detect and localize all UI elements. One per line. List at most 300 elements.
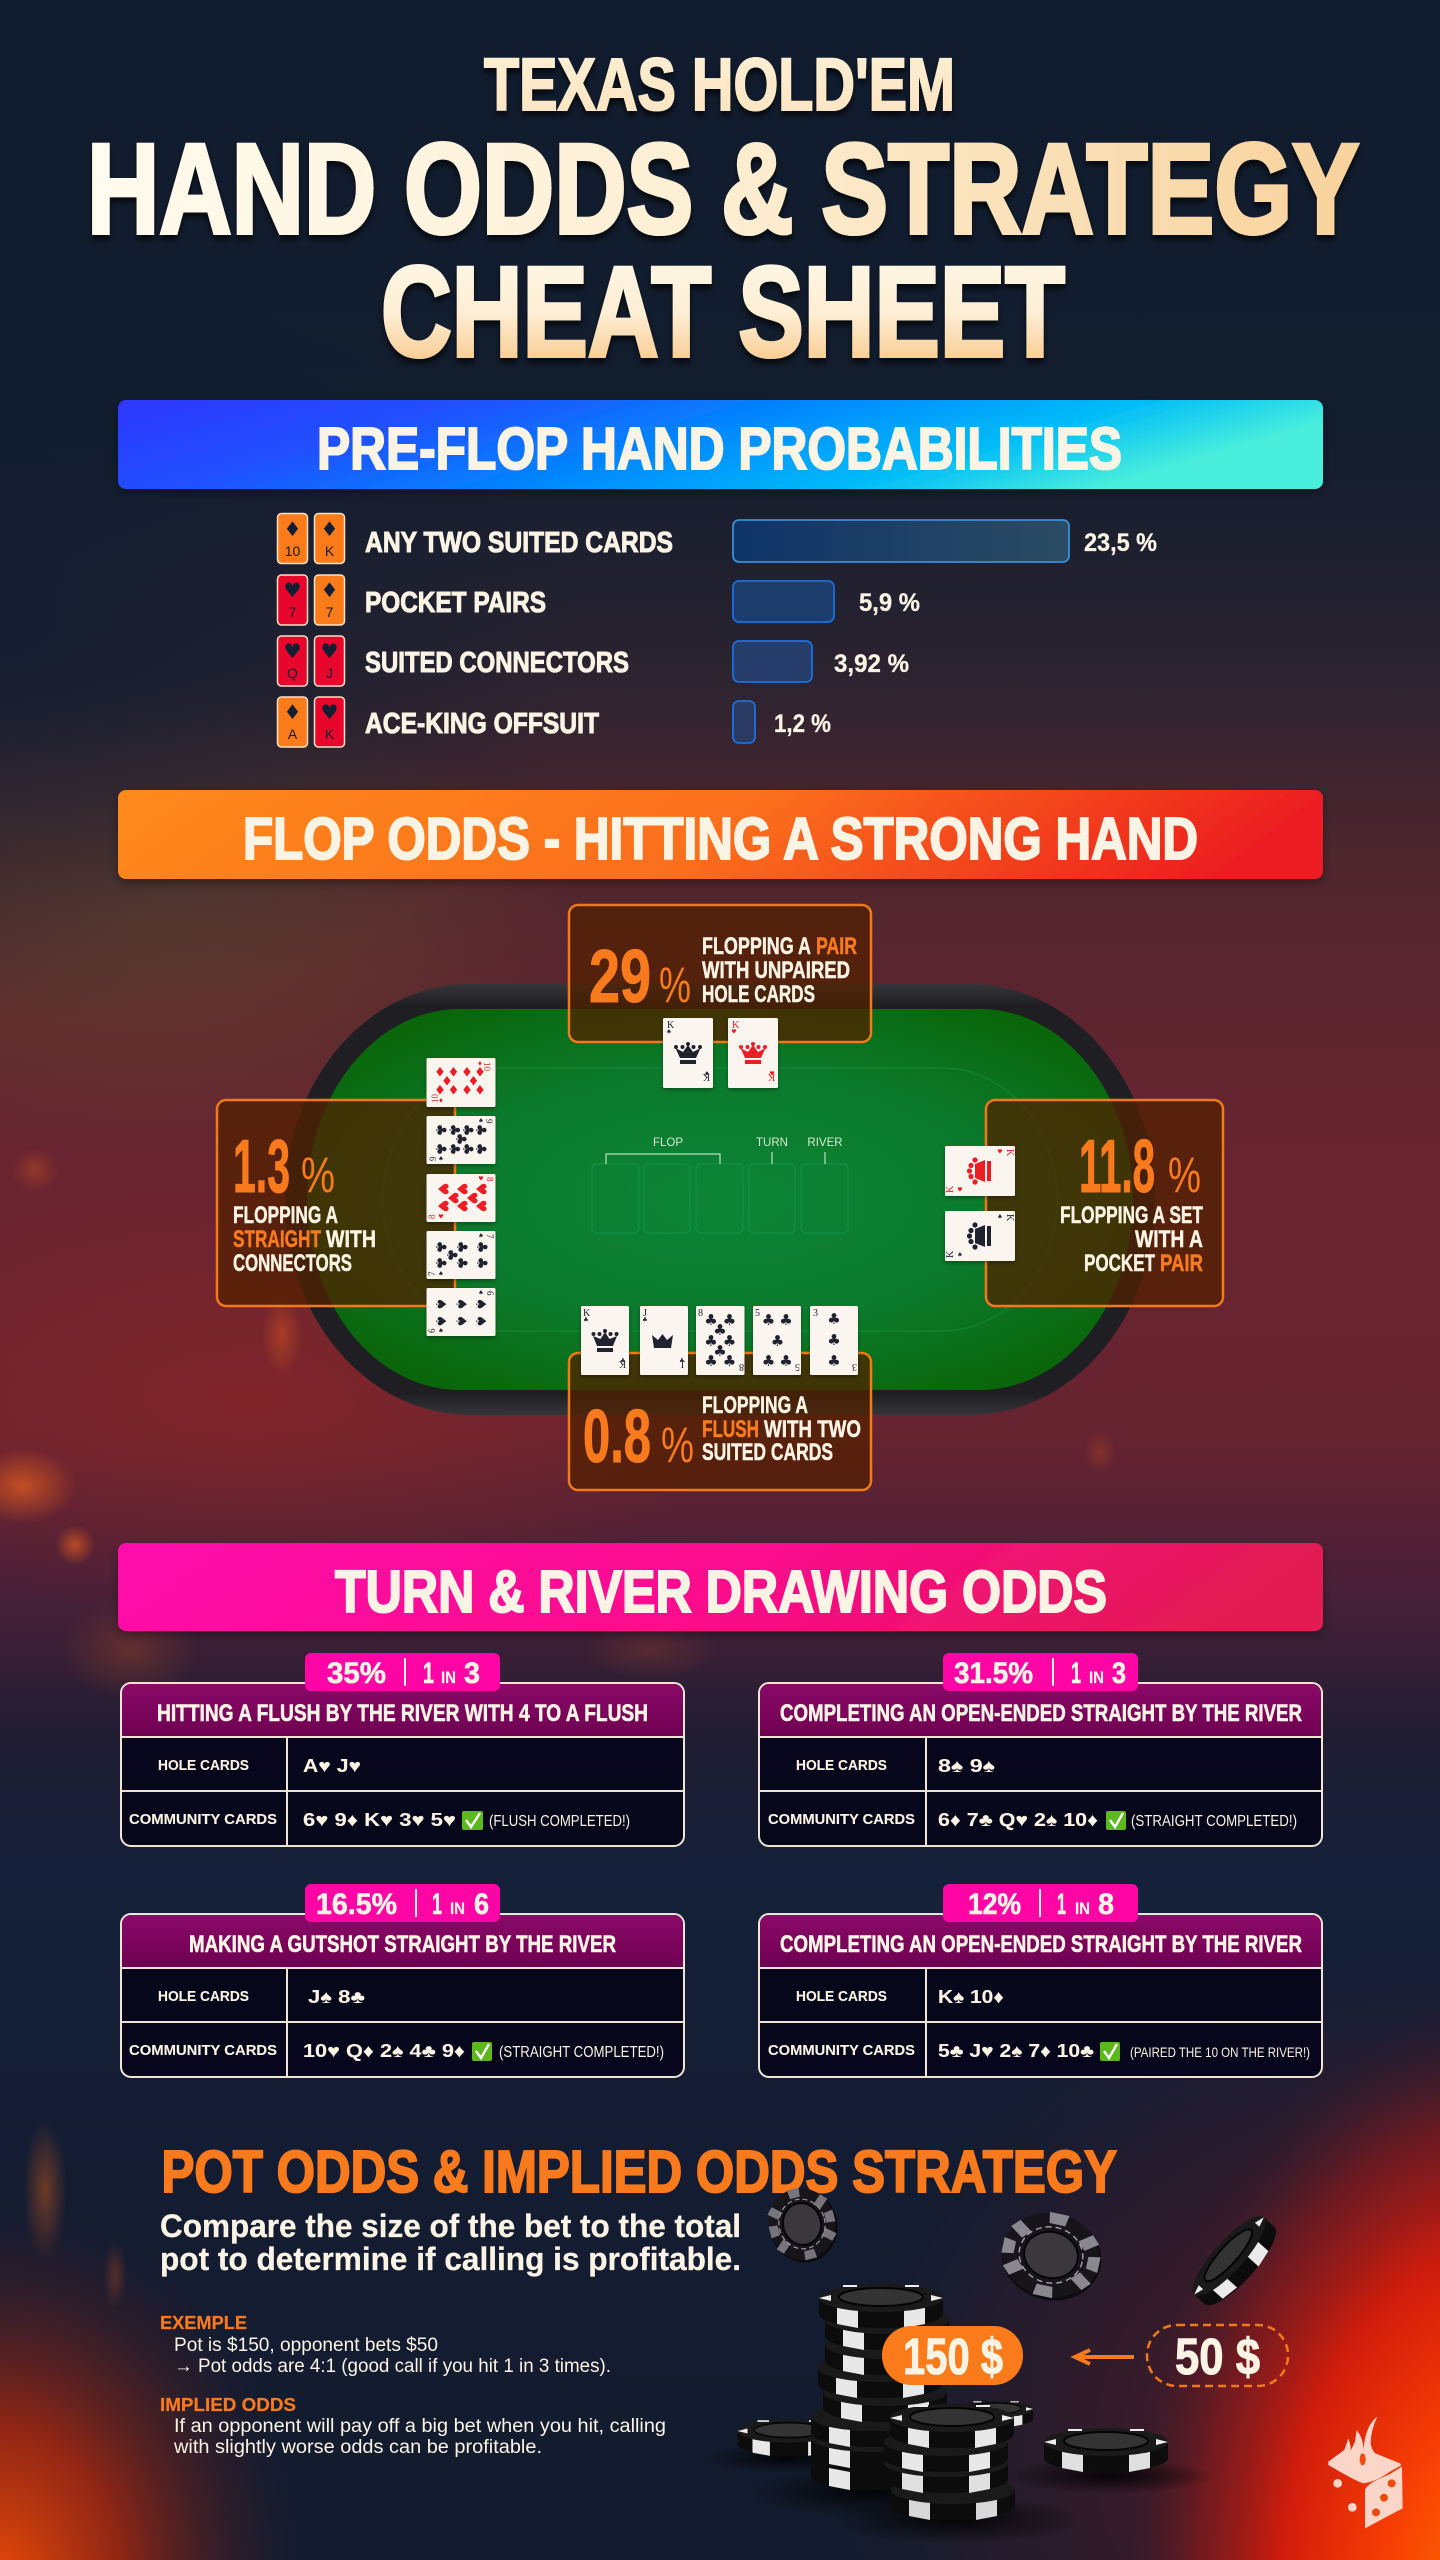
heading: pre-flop hand probabilities: PRE-FLOP HAND PROBABILITIES [317, 416, 1122, 482]
card: seven of clubs: ♠ [478, 1232, 484, 1240]
card icons: A of diamonds and K of hearts: ♥ [321, 700, 338, 724]
bar: 23.5% [733, 520, 1069, 562]
card: nine of clubs: ♣ [446, 1142, 462, 1156]
label: SUITED CONNECTORS [365, 647, 629, 679]
description: POCKET [1084, 1250, 1155, 1277]
card icons: 7 of hearts and 7 of diamonds: 7 [289, 604, 297, 620]
odds badge: IN [441, 1668, 456, 1687]
card: king of spades sideways: ♠ [997, 1214, 1003, 1220]
card: nine of clubs: ♣ [432, 1124, 448, 1136]
odds badge: 16.5% [316, 1888, 397, 1921]
percentage: % [301, 1147, 335, 1203]
card: ten of diamonds [426, 1058, 496, 1107]
odds badge: 3 [1112, 1657, 1126, 1690]
community card slots [592, 1164, 848, 1233]
card icons: A of diamonds and K of hearts: ♦ [284, 700, 301, 724]
value: 23,5 % [1084, 529, 1157, 557]
odds badge: 3 [464, 1657, 480, 1690]
card: king of hearts sideways: K [945, 1185, 956, 1193]
percentage: % [661, 1417, 694, 1473]
percentage: 0.8 [583, 1394, 651, 1478]
card: nine of clubs: ♣ [432, 1142, 448, 1156]
callout: flopping a flush [569, 1353, 871, 1490]
value: 5,9 % [859, 589, 920, 617]
card: nine of clubs: ♣ [446, 1124, 462, 1136]
text block: intro: Compare the size of the bet to the total [160, 2208, 741, 2244]
card: nine of clubs: ♣ [452, 1132, 468, 1146]
card: jack of clubs [640, 1306, 688, 1375]
text block: implied odds: If an opponent will pay off a big bet when you hit, calling [174, 2416, 666, 2437]
row: pocket pairs [278, 575, 920, 625]
card: six of spades: ♠ [472, 1314, 488, 1328]
row: any two suited cards [278, 514, 1157, 564]
hole cards row: HOLE CARDS [796, 1758, 887, 1774]
community cards row: (PAIRED THE 10 ON THE RIVER!) [1130, 2044, 1310, 2060]
icon: flaming dice logo [1328, 2417, 1403, 2528]
odds badge: 31.5% [954, 1657, 1033, 1690]
card: nine of clubs: ♣ [472, 1142, 488, 1156]
card: seven of clubs: ♣ [473, 1240, 489, 1254]
card: king of clubs [581, 1306, 629, 1375]
heading: turn and river drawing odds: TURN & RIVER DRAWING ODDS [335, 1559, 1107, 1625]
community cards row: 10♥ Q♦ 2♠ 4♣ 9♦ [303, 2041, 465, 2061]
card: eight of clubs: 8 [739, 1361, 744, 1372]
odds badge: IN [1075, 1899, 1090, 1918]
card: five of clubs: 5 [795, 1361, 800, 1372]
community cards row: (STRAIGHT COMPLETED!) [499, 2044, 664, 2061]
card: eight of hearts: ♥ [463, 1192, 479, 1204]
card: six of spades: ♠ [452, 1298, 468, 1310]
card icons: 7 of hearts and 7 of diamonds: ♦ [321, 578, 338, 602]
heading: pre-flop hand probabilities [118, 400, 1323, 489]
description: FLOPPING A [702, 1392, 808, 1419]
card: king of spades sideways: ♠ [957, 1252, 963, 1258]
pill: bet 50 dollars: 50 $ [1175, 2328, 1260, 2385]
card: king of hearts: K [732, 1020, 740, 1031]
description: FLOPPING A SET [1060, 1202, 1203, 1229]
card: seven of clubs: 7 [485, 1234, 495, 1239]
card: king of hearts sideways [945, 1146, 1015, 1196]
hole cards row: A♥ J♥ [303, 1756, 361, 1776]
card: three of clubs: ♣ [827, 1331, 841, 1349]
card icons: A of diamonds and K of hearts: A [288, 726, 298, 742]
odds badge: 1 [423, 1657, 434, 1690]
community cards row [768, 2041, 1310, 2061]
title line: Texas Hold'em: TEXAS HOLD'EM [484, 43, 955, 126]
community cards row: (STRAIGHT COMPLETED!) [1131, 1813, 1297, 1830]
card: ten of diamonds: ♦ [448, 1084, 459, 1098]
card icons: 7 of hearts and 7 of diamonds: 7 [326, 604, 334, 620]
odds badge: 12% [968, 1888, 1021, 1921]
card icons: 7 of hearts and 7 of diamonds [278, 575, 344, 625]
card: nine of clubs: ♣ [459, 1124, 475, 1136]
card: king of spades sideways: K [1004, 1214, 1015, 1222]
card: eight of hearts: ♥ [434, 1182, 450, 1196]
description [702, 933, 857, 1008]
card icons: 10 and K of diamonds: K [325, 543, 335, 559]
description [233, 1202, 376, 1277]
chip stack: tall [811, 2284, 949, 2490]
card: three of clubs: ♣ [827, 1310, 841, 1328]
community cards row: 6♦ 7♣ Q♥ 2♠ 10♦ [938, 1810, 1098, 1830]
card: six of spades: ♠ [472, 1298, 488, 1310]
chip: left single [738, 2419, 840, 2456]
title line: Cheat Sheet: CHEAT SHEET [381, 241, 1065, 384]
card: nine of clubs: 9 [484, 1119, 494, 1124]
card: eight of hearts: ♥ [434, 1200, 450, 1212]
card: jack of clubs: ♣ [642, 1316, 648, 1324]
flying chip: right [1183, 2207, 1285, 2314]
pill: pot 150 dollars: 150 $ [903, 2328, 1003, 2385]
card: eight of clubs: ♣ [723, 1332, 736, 1350]
table header: COMPLETING AN OPEN-ENDED STRAIGHT BY THE RIVER [780, 1931, 1302, 1958]
cards: right pocket pair [945, 1146, 1015, 1261]
card: seven of clubs: ♣ [443, 1248, 459, 1262]
odds badge: 1 [432, 1888, 442, 1921]
cards: top hole cards, two kings [663, 1018, 778, 1088]
table header [122, 1915, 683, 1968]
poker table [285, 984, 1155, 1415]
heading: turn and river drawing odds [118, 1543, 1323, 1631]
card: jack of clubs: ♣ [679, 1358, 685, 1364]
odds badge: IN [1089, 1668, 1104, 1687]
panel: flush by the river [121, 1653, 684, 1846]
bar: 1.2% [733, 701, 755, 743]
odds badge [943, 1884, 1138, 1922]
arrow: bet to pot [1075, 2350, 1134, 2364]
community cards row: COMMUNITY CARDS [129, 1812, 277, 1828]
hole cards row [796, 1756, 996, 1776]
hole cards row [158, 1756, 361, 1776]
card: six of spades: ♠ [432, 1314, 448, 1328]
card: king of spades [663, 1018, 713, 1088]
description: CONNECTORS [233, 1250, 352, 1277]
card: seven of clubs: ♠ [438, 1270, 444, 1278]
card: three of clubs: ♣ [827, 1352, 841, 1370]
table rail [285, 984, 1155, 1415]
odds badge [943, 1653, 1138, 1691]
heading: flop odds: FLOP ODDS - HITTING A STRONG HAND [243, 806, 1198, 872]
odds badge: 1 [1071, 1657, 1081, 1690]
card icons: Q and J of hearts: ♥ [321, 639, 338, 663]
card: eight of hearts: ♥ [472, 1200, 488, 1212]
hole cards row: HOLE CARDS [158, 1758, 249, 1774]
card: king of spades: K [702, 1071, 710, 1082]
description: STRAIGHT [233, 1226, 321, 1253]
community cards row: 6♥ 9♦ K♥ 3♥ 5♥ [303, 1810, 456, 1830]
community cards row [129, 1810, 630, 1830]
heading: pot odds and implied odds strategy: POT ODDS & IMPLIED ODDS STRATEGY [162, 2139, 1117, 2205]
chip: far behind [959, 2401, 1033, 2427]
card: eight of hearts [426, 1174, 496, 1222]
table header [760, 1915, 1321, 1968]
card: five of clubs [753, 1306, 801, 1375]
card: ten of diamonds: ♦ [441, 1074, 453, 1090]
label: ANY TWO SUITED CARDS [365, 527, 673, 559]
card: king of clubs: K [618, 1358, 626, 1369]
description: WITH [326, 1226, 376, 1253]
chip stacks [700, 2284, 1215, 2544]
description: WITH A [1135, 1226, 1203, 1253]
card: eight of hearts: ♥ [472, 1182, 488, 1196]
card: nine of clubs [426, 1116, 496, 1164]
hole cards row: K♠ 10♦ [938, 1987, 1004, 2007]
card: six of spades: ♠ [452, 1314, 468, 1328]
card: nine of clubs: ♠ [438, 1156, 444, 1162]
card: six of spades [426, 1288, 496, 1336]
card: ten of diamonds: ♦ [477, 1060, 483, 1068]
card: seven of clubs: ♣ [453, 1256, 469, 1270]
pill: bet 50 dollars [1147, 2325, 1288, 2386]
card: three of clubs [810, 1306, 858, 1375]
icon: check mark [1100, 2042, 1120, 2061]
text block: example: Pot is $150, opponent bets $50 [174, 2335, 438, 2356]
card: king of hearts sideways: ♥ [997, 1148, 1003, 1156]
odds badge: 35% [327, 1657, 386, 1690]
card: eight of hearts: ♥ [438, 1214, 444, 1220]
card: nine of clubs: ♣ [459, 1142, 475, 1156]
card: ten of diamonds: ♦ [474, 1066, 486, 1080]
card: king of spades: K [667, 1020, 675, 1031]
card icons: Q and J of hearts [278, 636, 344, 686]
card: ten of diamonds: ♦ [468, 1074, 479, 1090]
card: eight of clubs: ♣ [704, 1352, 718, 1370]
table header: COMPLETING AN OPEN-ENDED STRAIGHT BY THE RIVER [780, 1700, 1302, 1727]
card icons: Q and J of hearts: J [326, 665, 333, 681]
odds badge: 8 [1098, 1888, 1114, 1921]
value: 1,2 % [774, 710, 831, 738]
card icons: 10 and K of diamonds: ♦ [284, 517, 301, 541]
card: king of spades sideways: K [945, 1250, 956, 1258]
hole cards row: HOLE CARDS [158, 1989, 249, 2005]
card: eight of clubs: ♣ [723, 1311, 736, 1329]
flop label: FLOP [653, 1137, 683, 1149]
card icons: Q and J of hearts: Q [287, 665, 298, 681]
table felt [307, 1009, 1133, 1390]
flying chip: left [761, 2180, 846, 2270]
icon: check mark [472, 2042, 492, 2061]
text block: example: → Pot odds are 4:1 (good call if you hit 1 in 3 times). [174, 2356, 611, 2377]
card icons: A of diamonds and K of hearts [278, 697, 344, 747]
card: king of clubs: K [583, 1308, 591, 1319]
row: suited connectors [278, 636, 909, 686]
card: ten of diamonds: ♦ [474, 1084, 486, 1098]
card icons: 10 and K of diamonds: ♦ [321, 517, 338, 541]
text block: intro [160, 2208, 741, 2277]
card: three of clubs: 3 [852, 1361, 857, 1372]
icon: check mark [462, 1811, 483, 1830]
turn label: TURN [756, 1137, 788, 1149]
hole cards row: 8♠ 9♠ [938, 1756, 996, 1776]
card: ten of diamonds: 10 [430, 1094, 440, 1103]
community cards row: 5♣ J♥ 2♠ 7♦ 10♣ [938, 2041, 1094, 2061]
callout: flopping a pair [569, 905, 871, 1042]
description: FLOPPING A [233, 1202, 338, 1229]
description: FLOPPING A [702, 933, 811, 960]
card: king of clubs: ♣ [620, 1358, 626, 1364]
card: jack of clubs: J [681, 1358, 685, 1369]
label: ACE-KING OFFSUIT [365, 708, 599, 740]
card: eight of clubs [696, 1306, 744, 1375]
description: FLUSH [702, 1416, 759, 1443]
hole cards row: HOLE CARDS [796, 1989, 887, 2005]
text block: example [160, 2313, 611, 2377]
percentage: % [1168, 1147, 1201, 1203]
community cards row [768, 1810, 1297, 1830]
card: seven of clubs [426, 1231, 496, 1279]
percentage: 1.3 [233, 1124, 290, 1208]
cards: left straight [426, 1058, 496, 1336]
community cards row: COMMUNITY CARDS [768, 1812, 915, 1828]
card: eight of hearts: 8 [427, 1214, 437, 1219]
card: five of clubs: ♣ [762, 1311, 775, 1329]
card icons: Q and J of hearts: ♥ [284, 639, 301, 663]
chip: right single [1044, 2428, 1168, 2472]
card: nine of clubs: ♠ [478, 1118, 484, 1124]
card: eight of clubs: ♣ [723, 1352, 736, 1370]
card: six of spades: 6 [427, 1328, 437, 1333]
card: seven of clubs: ♣ [473, 1256, 489, 1270]
card: eight of hearts: ♥ [478, 1176, 484, 1182]
card: eight of hearts: ♥ [453, 1200, 469, 1212]
table header: MAKING A GUTSHOT STRAIGHT BY THE RIVER [189, 1931, 616, 1958]
flop, turn, river brackets [606, 1152, 825, 1164]
card: eight of hearts: ♥ [444, 1192, 460, 1204]
text block: implied odds [160, 2395, 666, 2458]
card: ten of diamonds: ♦ [448, 1066, 459, 1080]
table header: HITTING A FLUSH BY THE RIVER WITH 4 TO A FLUSH [157, 1700, 648, 1727]
card: eight of hearts: 8 [485, 1177, 495, 1182]
hole cards row: J♠ 8♣ [308, 1987, 365, 2007]
card: ten of diamonds: ♦ [461, 1066, 473, 1080]
description: WITH UNPAIRED [702, 957, 850, 984]
card: six of spades: ♠ [438, 1328, 444, 1334]
panel: open-ended straight, top right [759, 1653, 1322, 1846]
card: ten of diamonds: ♦ [461, 1084, 473, 1098]
card: king of hearts: ♥ [731, 1028, 737, 1036]
row: ace-king offsuit [278, 697, 831, 747]
description: PAIR [1160, 1250, 1203, 1277]
text block: implied odds: IMPLIED ODDS [160, 2395, 296, 2415]
chip stack: short [884, 2404, 1015, 2520]
community cards row: (FLUSH COMPLETED!) [489, 1813, 630, 1830]
callout: flopping a set [986, 1100, 1223, 1306]
card icons: 7 of hearts and 7 of diamonds: ♥ [284, 578, 301, 602]
river label: RIVER [807, 1137, 843, 1149]
title [87, 43, 1359, 384]
card: nine of clubs: ♣ [472, 1124, 488, 1136]
felt inner line [383, 1068, 1057, 1331]
description: PAIR [816, 933, 857, 960]
card: eight of clubs: ♣ [713, 1342, 727, 1360]
card: king of hearts: K [767, 1071, 775, 1082]
flying chip: middle [994, 2204, 1110, 2310]
community cards row [129, 2041, 664, 2061]
heading: flop odds [118, 790, 1323, 879]
card: five of clubs: ♣ [779, 1352, 793, 1370]
card: ten of diamonds: ♦ [434, 1066, 446, 1080]
card: ten of diamonds: 10 [482, 1062, 492, 1072]
card: king of hearts: ♥ [769, 1070, 775, 1078]
value: 3,92 % [834, 650, 909, 678]
card: king of clubs: ♣ [583, 1316, 589, 1324]
card: king of hearts sideways: ♥ [957, 1186, 963, 1194]
percentage: 29 [589, 934, 651, 1018]
card: six of spades: ♠ [478, 1290, 484, 1296]
text block: implied odds: with slightly worse odds can be profitable. [173, 2437, 542, 2458]
hole cards row [796, 1987, 1004, 2007]
percentage: % [659, 957, 691, 1013]
description: SUITED CARDS [702, 1439, 833, 1466]
card: six of spades: 6 [485, 1291, 495, 1296]
card icons: 10 and K of diamonds [278, 514, 344, 564]
card: king of spades sideways [945, 1211, 1015, 1261]
card: eight of hearts: ♥ [453, 1182, 469, 1196]
hole cards row [158, 1987, 365, 2007]
card: five of clubs: ♣ [771, 1332, 784, 1350]
description: WITH TWO [764, 1416, 861, 1443]
odds badge: 1 [1057, 1888, 1066, 1921]
odds badge [305, 1653, 500, 1691]
card: eight of clubs: 8 [698, 1308, 703, 1319]
description [1060, 1202, 1203, 1277]
odds badge: 6 [474, 1888, 489, 1921]
card: seven of clubs: ♣ [453, 1240, 469, 1254]
card: seven of clubs: ♣ [432, 1256, 448, 1270]
card: eight of clubs: ♣ [704, 1332, 718, 1350]
percentage: 11.8 [1079, 1124, 1155, 1208]
text block: intro: pot to determine if calling is profitable. [160, 2241, 741, 2277]
table header [122, 1684, 683, 1737]
card: six of spades: ♠ [432, 1298, 448, 1310]
card: ten of diamonds: ♦ [434, 1084, 446, 1098]
table header [760, 1684, 1321, 1737]
bar: 5.9% [733, 581, 834, 622]
card: eight of clubs: ♣ [704, 1311, 718, 1329]
card: seven of clubs: 7 [427, 1271, 437, 1276]
card icons: A of diamonds and K of hearts: K [325, 726, 335, 742]
card: ten of diamonds: ♦ [438, 1098, 444, 1104]
icon: check mark [1106, 1811, 1126, 1830]
card: nine of clubs: 9 [428, 1156, 438, 1161]
card: king of hearts sideways: K [1004, 1149, 1015, 1157]
card: eight of clubs: ♣ [713, 1321, 727, 1339]
panel: open-ended straight, bottom right [759, 1884, 1322, 2077]
card: jack of clubs: J [643, 1308, 647, 1319]
panel: pre-flop rows [278, 514, 1157, 747]
bar: 3.92% [733, 641, 812, 682]
card: five of clubs: ♣ [779, 1311, 793, 1329]
text block: example: EXEMPLE [160, 2313, 247, 2333]
card: three of clubs: 3 [813, 1308, 818, 1319]
cards: bottom clubs flush [581, 1306, 858, 1375]
card: five of clubs: ♣ [762, 1352, 775, 1370]
description [702, 1392, 861, 1466]
description: HOLE CARDS [702, 981, 815, 1008]
community cards row: COMMUNITY CARDS [129, 2043, 277, 2059]
community cards row: COMMUNITY CARDS [768, 2043, 915, 2059]
card: king of spades: ♠ [704, 1070, 710, 1078]
panel: gutshot straight [121, 1884, 684, 2077]
card icons: 10 and K of diamonds: 10 [285, 543, 300, 559]
card: king of hearts [728, 1018, 778, 1088]
odds badge [305, 1884, 500, 1922]
callout: flopping a straight [217, 1100, 455, 1306]
card: seven of clubs: ♣ [432, 1240, 448, 1254]
odds badge: IN [450, 1899, 465, 1918]
card: king of spades: ♠ [666, 1028, 672, 1036]
label: POCKET PAIRS [365, 587, 546, 619]
